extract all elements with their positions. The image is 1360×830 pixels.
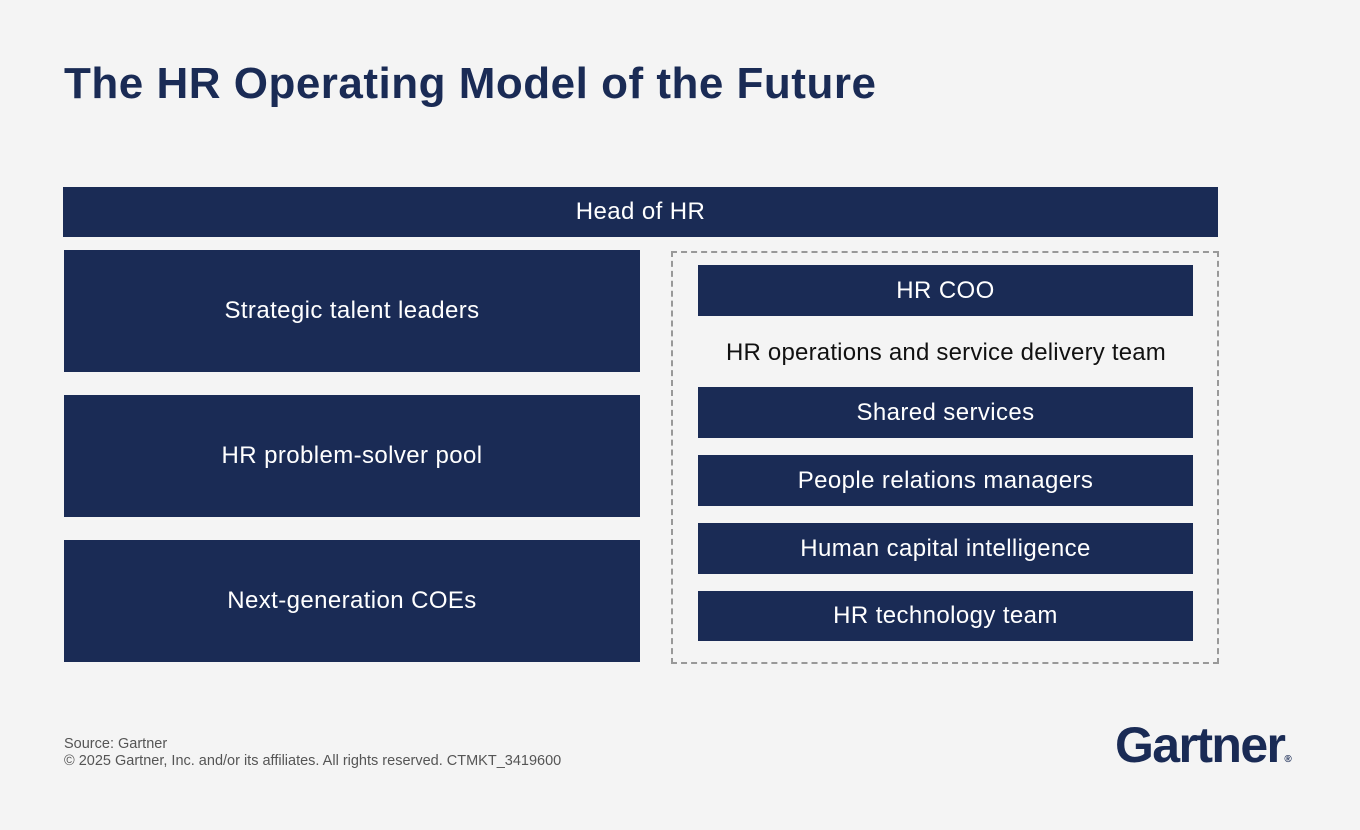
source text (64, 736, 561, 769)
box: problem-solver pool (64, 395, 640, 517)
label: operations team: HR operations and service delivery team (726, 339, 1166, 366)
box: next-gen COEs (64, 540, 640, 662)
box: shared services (698, 387, 1193, 438)
box: problem-solver pool: HR problem-solver pool (222, 442, 482, 469)
box: HR technology team: HR technology team (833, 602, 1058, 629)
box: head of HR (63, 187, 1218, 237)
box: human capital intelligence: Human capital intelligence (800, 534, 1091, 562)
source text: Source: Gartner (64, 736, 167, 752)
box: head of HR: Head of HR (576, 198, 705, 225)
box: shared services: Shared services (856, 398, 1035, 426)
box: people relations: People relations managers (798, 466, 1093, 494)
logo: Gartner® (1115, 717, 1290, 773)
box: next-gen COEs: Next-generation COEs (227, 587, 477, 614)
title: The HR Operating Model of the Future (64, 59, 876, 108)
source text: © 2025 Gartner, Inc. and/or its affiliates. All rights reserved. CTMKT_3419600 (64, 753, 561, 769)
box: strategic talent leaders: Strategic talent leaders (224, 297, 480, 324)
box: strategic talent leaders (64, 250, 640, 372)
box: HR COO: HR COO (896, 276, 995, 304)
panel: operations (671, 251, 1219, 664)
box: HR technology team (698, 591, 1193, 641)
box: human capital intelligence (698, 523, 1193, 574)
box: HR COO (698, 265, 1193, 316)
box: people relations (698, 455, 1193, 506)
